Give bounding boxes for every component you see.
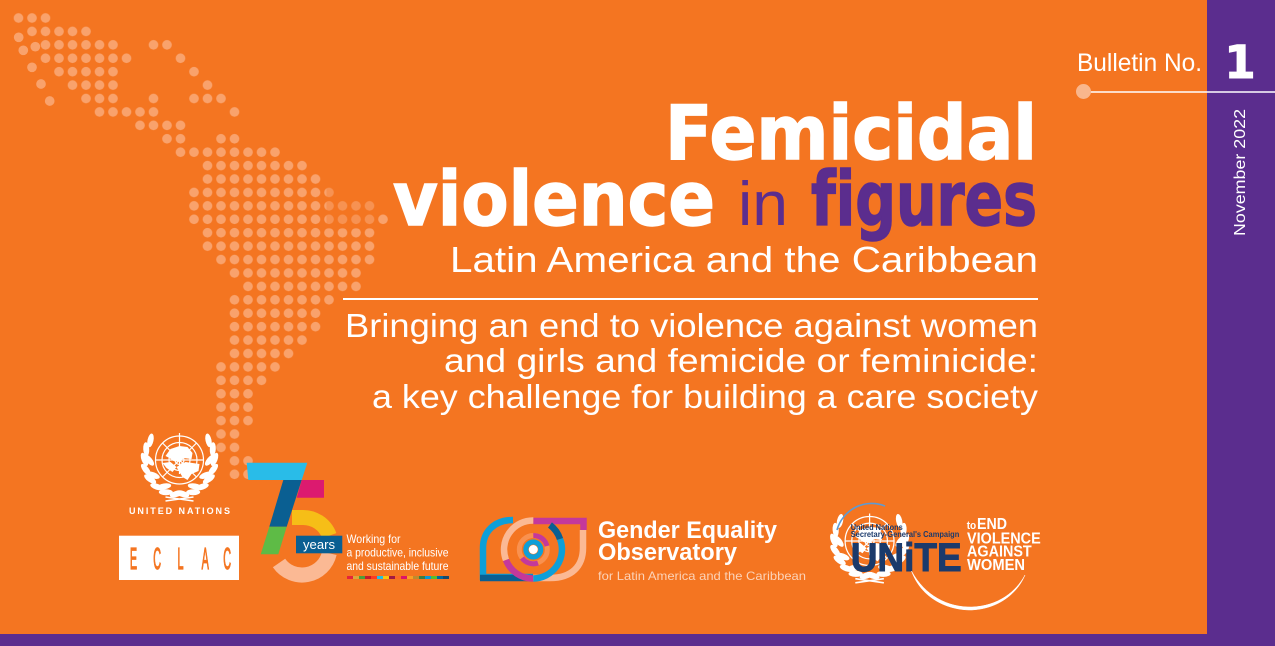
- logo: 75 years: Working for: [346, 532, 400, 546]
- logo: United Nations: UNITED NATIONS: [129, 506, 230, 516]
- tagline: a key challenge for building a care society: [372, 378, 1039, 415]
- logo: 75 years: a productive, inclusive: [346, 546, 449, 560]
- date: November 2022: [1232, 109, 1249, 236]
- tagline: and girls and femicide or feminicide:: [444, 342, 1038, 379]
- logo: ECLAC: [119, 536, 239, 580]
- logo: UNiTE campaign: END: [977, 516, 1007, 533]
- logo: UNiTE campaign: VIOLENCE: [967, 530, 1041, 547]
- bulletin number: 1: [1224, 36, 1256, 89]
- subtitle: Latin America and the Caribbean: [450, 239, 1038, 280]
- bulletin label: Bulletin No.: [1077, 49, 1202, 77]
- title: in: [738, 170, 788, 239]
- logo: Gender Equality Observatory: Gender Equality: [598, 517, 778, 544]
- bottom band: [0, 634, 1275, 646]
- title: Femicidal: [665, 89, 1037, 177]
- logo: ECLAC: ECLAC: [130, 541, 231, 576]
- bulletin rule with dot: [1076, 84, 1275, 99]
- logo: UNiTE campaign: UNiTE: [851, 536, 962, 580]
- icon: observatory eye: [480, 520, 584, 579]
- logo: UNiTE campaign: [828, 503, 1041, 610]
- logo: United Nations: [129, 433, 230, 516]
- logo: UNiTE campaign: United Nations: [851, 523, 903, 532]
- logo: 75 years: and sustainable future: [346, 559, 449, 573]
- logo: UNiTE campaign: WOMEN: [967, 557, 1025, 574]
- tagline: Bringing an end to violence against women: [345, 307, 1038, 344]
- logo: Gender Equality Observatory: Observatory: [598, 539, 738, 566]
- tagline: [345, 307, 1039, 415]
- logo: 75 years: [247, 463, 449, 579]
- logo: Gender Equality Observatory: [480, 517, 806, 583]
- logo: 75 years: years: [303, 537, 335, 552]
- title: figures: [811, 155, 1037, 243]
- logo: Gender Equality Observatory: for Latin America and the Caribbean: [598, 569, 806, 583]
- side band: [1207, 0, 1275, 646]
- logo: UNiTE campaign: AGAINST: [967, 544, 1032, 560]
- logo: UNiTE campaign: to: [967, 520, 976, 532]
- title: [393, 89, 1037, 243]
- dotted map of Latin America: [12, 11, 390, 481]
- title: violence: [393, 155, 715, 243]
- logo: UNiTE campaign: Secretary-General's Campaign: [851, 530, 959, 539]
